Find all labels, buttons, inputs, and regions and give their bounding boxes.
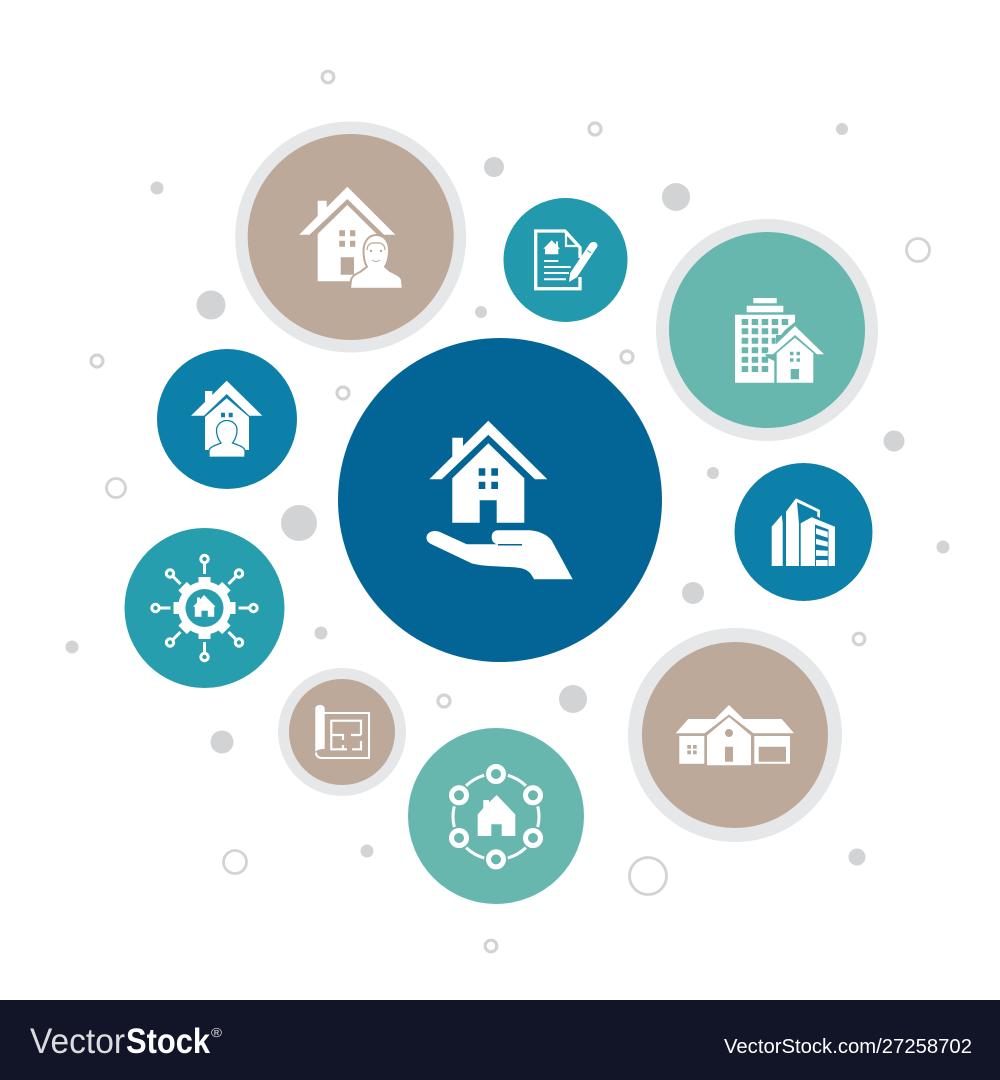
icon: office tower with house — [735, 298, 824, 383]
bubble: home community network — [408, 728, 584, 904]
icon: gear with home and nodes — [152, 555, 257, 661]
bubble: contract document — [504, 198, 628, 322]
bubble: agent and house — [235, 122, 466, 352]
icon: house with person — [299, 187, 403, 289]
bubble: tower and house — [656, 219, 878, 441]
logo wordmark: ® — [211, 1025, 222, 1040]
icon: house inside node ring — [452, 766, 540, 867]
bubble: city buildings — [734, 463, 872, 601]
decorative ring dots — [91, 71, 930, 952]
logo wordmark — [30, 1022, 222, 1061]
central bubble: house in hand — [338, 338, 662, 662]
icon: skyscrapers — [772, 498, 835, 566]
decorative filled dots — [66, 123, 950, 866]
icon: blueprint — [315, 705, 369, 758]
icon: ranch house with garage — [676, 705, 794, 765]
watermark footer bar — [0, 1000, 1000, 1080]
logo wordmark: Vector — [30, 1022, 125, 1061]
logo wordmark: Stock — [126, 1022, 210, 1061]
bubble: gear network — [124, 528, 284, 688]
icon: document and pen — [536, 231, 598, 289]
bubble: ranch house — [628, 628, 842, 842]
icon: house on open hand — [426, 421, 573, 579]
image reference URL: VectorStock.com/27258702 — [724, 1036, 972, 1058]
bubble: floor plan — [278, 668, 406, 796]
bubble: person at home — [157, 349, 297, 489]
icon: house with person silhouette — [191, 381, 262, 457]
